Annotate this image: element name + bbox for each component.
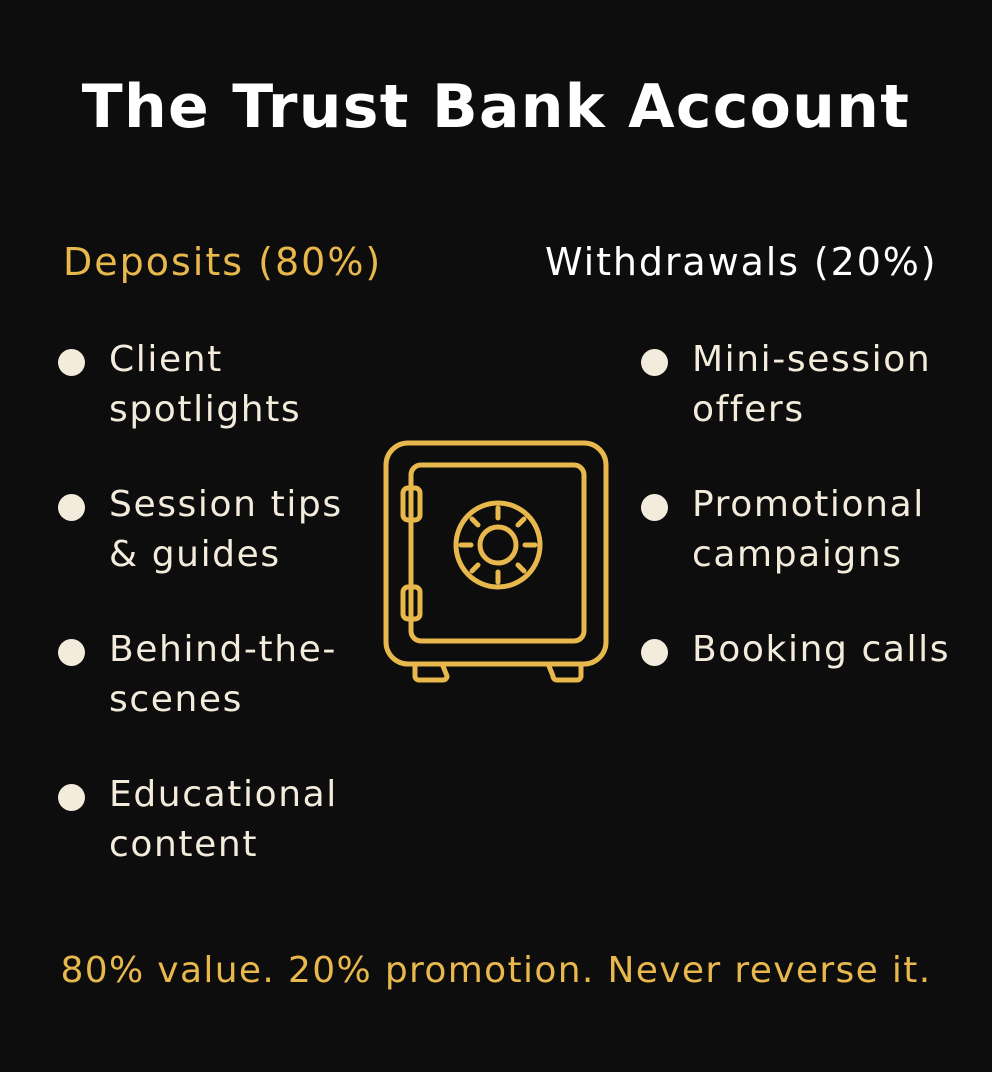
item: behind-the-scenes [58,629,337,720]
item: booking calls: Booking calls [692,629,950,670]
item: mini-session offers: offers [692,389,805,430]
item: promotional campaigns: campaigns [692,534,903,575]
item: client spotlights [58,339,301,430]
item: session tips [58,484,343,575]
item: behind-the-scenes: scenes [109,679,243,720]
item: behind-the-scenes: Behind-the- [109,629,337,670]
item: promotional campaigns [641,484,925,575]
list: deposits [58,339,343,865]
item: client spotlights: Client [109,339,223,380]
heading: withdrawals: Withdrawals (20%) [545,240,938,284]
list: withdrawals [641,339,950,670]
title: The Trust Bank Account [82,72,910,142]
item: educational content: content [109,824,258,865]
footer tagline: 80% value. 20% promotion. Never reverse it. [60,950,932,991]
icon: safe [384,440,608,682]
item: educational content [58,774,338,865]
item: mini-session offers: Mini-session [692,339,931,380]
item: educational content: Educational [109,774,338,815]
heading: deposits: Deposits (80%) [63,240,382,284]
item: session tips: Session tips [109,484,343,525]
item: mini-session offers [641,339,931,430]
item: client spotlights: spotlights [109,389,301,430]
item: promotional campaigns: Promotional [692,484,925,525]
item: session tips: & guides [109,534,281,575]
